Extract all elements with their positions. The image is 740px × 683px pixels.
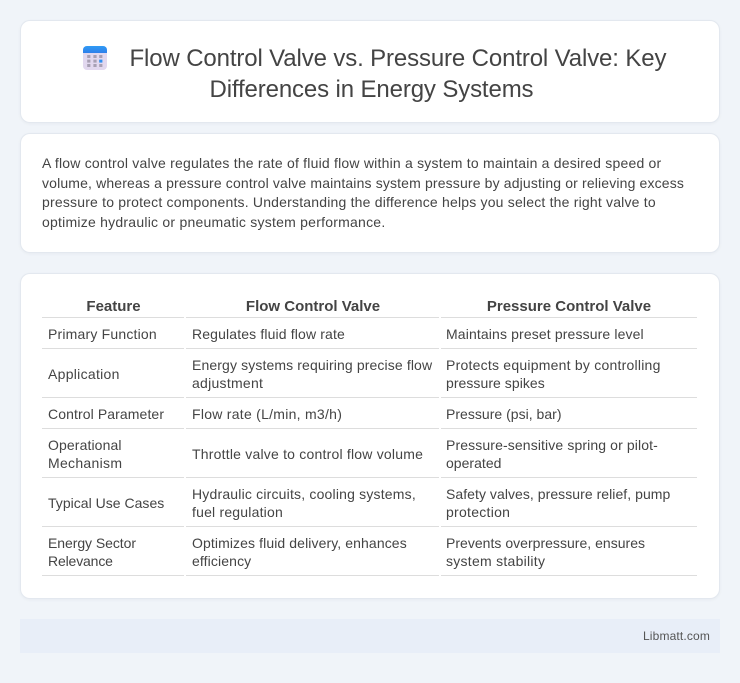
text block: introduction: volume, whereas a pressure control valve maintains system pressure by adjusting or relieving excess — [42, 174, 684, 190]
text block: introduction: A flow control valve regulates the rate of fluid flow within a system to maintain a desired speed or — [42, 155, 661, 171]
row: operational mechanism: Throttle valve to control flow volume — [192, 446, 423, 462]
row: operational mechanism: operated — [446, 455, 501, 471]
row: control parameter: Pressure (psi, bar) — [446, 406, 562, 422]
row: primary function: Maintains preset pressure level — [446, 326, 644, 342]
row: typical use cases: Hydraulic circuits, cooling systems, — [192, 486, 416, 502]
row: energy sector relevance: efficiency — [192, 553, 251, 569]
row: application: Energy systems requiring precise flow — [192, 357, 432, 373]
title: Flow Control Valve vs. Pressure Control Valve: Key — [130, 45, 666, 72]
row: control parameter: Flow rate (L/min, m3/h) — [192, 406, 342, 422]
row: energy sector relevance — [48, 535, 645, 569]
row: primary function: Primary Function — [48, 326, 157, 342]
row: energy sector relevance: system stability — [446, 553, 545, 569]
icon: calendar grid — [83, 46, 107, 70]
row: energy sector relevance: Relevance — [48, 553, 113, 569]
row: control parameter — [48, 406, 562, 422]
title: Differences in Energy Systems — [210, 76, 533, 103]
row: primary function — [48, 326, 644, 342]
row: typical use cases — [48, 486, 670, 520]
row: typical use cases: fuel regulation — [192, 504, 283, 520]
row: typical use cases: Safety valves, pressure relief, pump — [446, 486, 670, 502]
row: operational mechanism: Mechanism — [48, 455, 122, 471]
footer bar — [20, 619, 720, 653]
row: operational mechanism: Operational — [48, 437, 122, 453]
text block: introduction: optimize hydraulic or pneumatic system performance. — [42, 214, 385, 230]
table header: Feature — [86, 298, 141, 315]
row: operational mechanism: Pressure-sensitive spring or pilot- — [446, 437, 658, 453]
title — [130, 45, 666, 103]
row: application: Protects equipment by controlling — [446, 357, 661, 373]
text block: introduction: pressure to protect components. Understanding the difference helps you select the right valve to — [42, 194, 656, 210]
row: control parameter: Control Parameter — [48, 406, 164, 422]
row: typical use cases: protection — [446, 504, 510, 520]
table header — [86, 298, 651, 315]
table header: Flow Control Valve — [246, 298, 380, 315]
row: operational mechanism — [48, 437, 658, 471]
row: application: adjustment — [192, 375, 263, 391]
row: primary function: Regulates fluid flow rate — [192, 326, 345, 342]
row: energy sector relevance: Optimizes fluid delivery, enhances — [192, 535, 407, 551]
panel: introduction — [20, 133, 720, 253]
row: typical use cases: Typical Use Cases — [48, 495, 164, 511]
table header: Pressure Control Valve — [487, 298, 651, 315]
row: energy sector relevance: Prevents overpressure, ensures — [446, 535, 645, 551]
row: energy sector relevance: Energy Sector — [48, 535, 136, 551]
row: application: pressure spikes — [446, 375, 545, 391]
row: application: Application — [48, 366, 120, 382]
panel: title card — [20, 20, 720, 123]
text block: introduction — [42, 155, 684, 230]
panel: comparison table — [20, 273, 720, 599]
footer text: Libmatt.com — [643, 629, 710, 643]
row: application — [48, 357, 661, 391]
